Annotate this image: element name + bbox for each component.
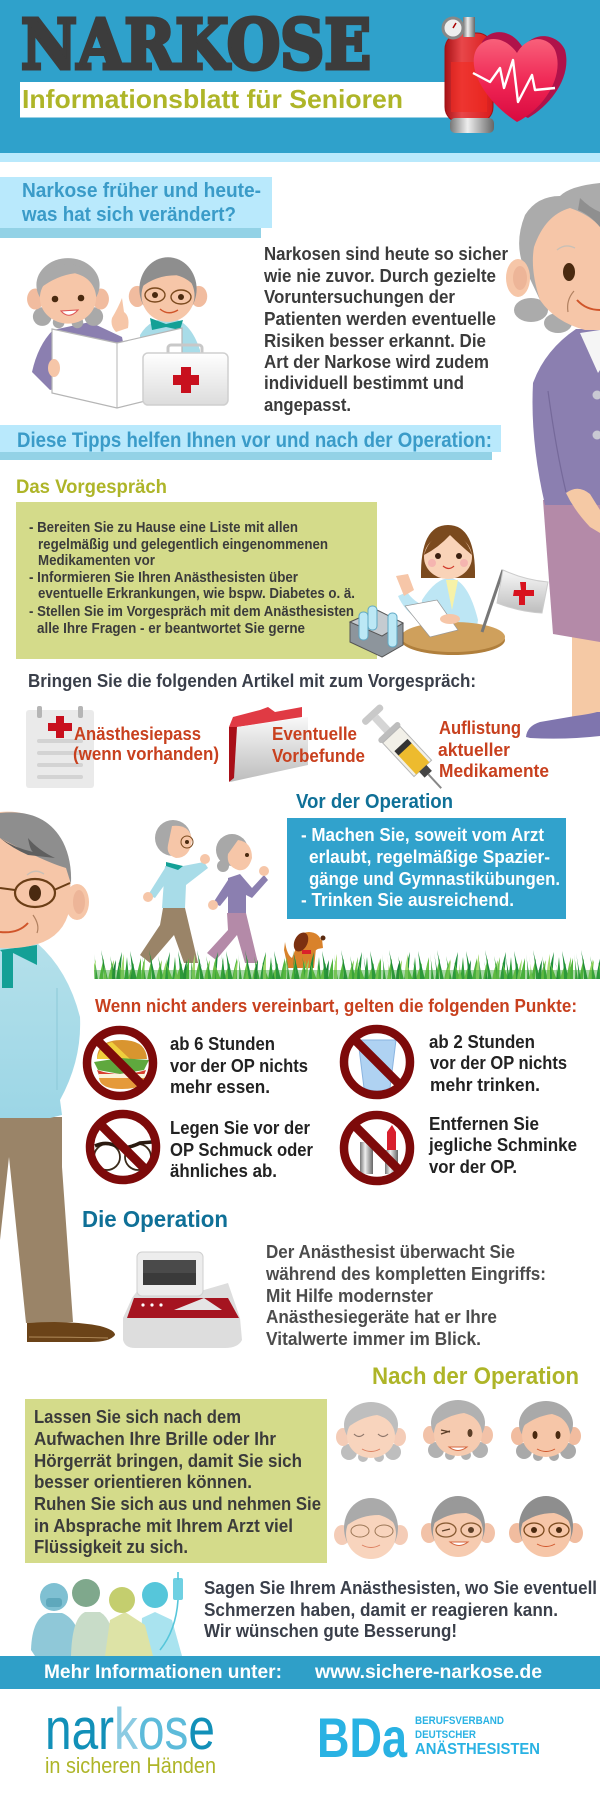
text block: intro paragraph: wie nie zuvor. Durch gezielte [263,266,496,286]
heading band: tips: Diese Tipps helfen Ihnen vor und nach der Operation: [17,429,492,452]
text: no drinks: vor der OP nichts [430,1053,567,1073]
text: no make-up: jegliche Schminke [428,1135,577,1155]
panel: Vorgespräch list: alle Ihre Fragen - er beantwortet Sie gerne [37,621,305,637]
logo: BDA: ANÄSTHESISTEN [415,1741,540,1758]
illustration: large grandpa on left [0,812,115,1342]
panel: before operation tips [287,818,566,919]
text: no make-up: Entfernen Sie [429,1114,539,1134]
icon: first aid kit [143,345,228,405]
icon: no drink [344,1029,410,1095]
text: no drinks: ab 2 Stunden [429,1032,535,1052]
icon: no glasses [90,1114,156,1180]
panel: Vorgespräch list: eventuelle Erkrankungen, wie bspw. Diabetes o. ä. [38,586,355,602]
text: bring items heading: Bringen Sie die folgenden Artikel mit zum Vorgespräch: [28,671,476,691]
illustration: doctor at table [350,525,548,657]
icon: winking man face [421,1496,495,1557]
heading band: tips [0,425,501,460]
text block: intro paragraph: angepasst. [264,395,351,415]
text block: operation: Anästhesiegeräte hat er Ihre [266,1307,497,1327]
icon: anaesthesia machine [123,1252,242,1348]
panel: after operation: Hörgerrät bringen, damit Sie sich [34,1451,302,1471]
panel: before operation tips: - Trinken Sie ausreichend. [301,890,514,910]
panel: after operation: besser orientieren können. [34,1472,252,1492]
label: Anästhesiepass: Anästhesiepass [74,724,201,744]
text: no drinks [429,1032,567,1095]
text block: operation: während des kompletten Eingriffs: [265,1264,546,1284]
text block: operation [265,1242,546,1349]
panel: after operation [25,1399,327,1563]
text: no food: ab 6 Stunden [170,1034,275,1054]
text block: intro paragraph: individuell bestimmt und [264,373,464,393]
panel: before operation tips: erlaubt, regelmäßige Spazier- [309,847,550,867]
text block: intro paragraph: Patienten werden eventuelle [264,309,496,329]
icon: no burger [87,1030,153,1096]
text block: closing note: Wir wünschen gute Besserung! [204,1621,457,1641]
heading: Narkose früher und heute: Narkose früher und heute- [22,180,261,202]
icon: sleeping woman face [336,1402,406,1462]
panel: before operation tips: - Machen Sie, soweit vom Arzt [301,825,544,845]
text block: intro paragraph: Narkosen sind heute so sicher [264,244,508,264]
label: Auflistung aktueller Medikamente: Auflistung [439,718,521,738]
heading: Das Vorgespräch: Das Vorgespräch [16,477,167,498]
heading: conditions: Wenn nicht anders vereinbart, gelten die folgenden Punkte: [95,996,577,1016]
subtitle bar: Informationsblatt für Senioren [22,84,403,114]
text: no food: vor der OP nichts [170,1056,308,1076]
text block: operation: Mit Hilfe modernster [266,1286,433,1306]
text block: intro paragraph [263,244,508,415]
icon: no lipstick [344,1115,410,1181]
panel: Vorgespräch list: Medikamenten vor [38,553,155,569]
text block: operation: Vitalwerte immer im Blick. [266,1329,481,1349]
text: no jewellery: OP Schmuck oder [170,1140,313,1160]
text block: intro paragraph: Voruntersuchungen der [264,287,455,307]
footer band: Mehr Informationen unter: [44,1662,282,1683]
logo: BDA: BERUFSVERBAND [415,1715,504,1727]
logo: narkose in sicheren Händen: narkose [45,1697,215,1762]
text: no jewellery: ähnliches ab. [170,1161,277,1181]
panel: after operation: Ruhen Sie sich aus und nehmen Sie [34,1494,321,1514]
panel: Vorgespräch list: - Informieren Sie Ihren Anästhesisten über [29,570,298,586]
illustration: senior couple reading with first aid kit [27,257,228,408]
panel: Vorgespräch list: - Stellen Sie im Vorgespräch mit dem Anästhesisten [29,604,354,620]
panel: after operation: Flüssigkeit zu sich. [34,1537,188,1557]
heading: Narkose früher und heute [0,177,272,238]
label: Auflistung aktueller Medikamente: Medikamente [439,761,549,781]
logo: BDA: DEUTSCHER [415,1729,476,1741]
text block: intro paragraph: Risiken besser erkannt. Die [264,331,486,351]
heading: Narkose früher und heute: was hat sich verändert? [21,204,236,226]
illustration: walking couple [140,820,326,968]
logo: BDA: BDa [317,1706,408,1769]
illustration: medical team [31,1572,183,1656]
heading: Vor der Operation: Vor der Operation [296,791,453,813]
heading: Nach der Operation: Nach der Operation [372,1363,579,1390]
panel: Vorgespräch list [16,502,377,659]
label: Eventuelle Vorbefunde: Vorbefunde [272,746,365,766]
icon: winking woman face [423,1400,493,1460]
walking man [140,820,210,963]
text block: intro paragraph: Art der Narkose wird zudem [264,352,489,372]
footer band: www.sichere-narkose.de [314,1662,542,1683]
header banner [0,0,600,162]
icon: test tube rack [350,606,403,657]
icon: anaesthesia pass clipboard [26,706,94,788]
label: Eventuelle Vorbefunde: Eventuelle [272,724,357,744]
logo: BDA [317,1706,540,1769]
label: Auflistung aktueller Medikamente [438,718,549,781]
text: no jewellery: Legen Sie vor der [170,1118,310,1138]
text block: closing note: Schmerzen haben, damit er reagieren kann. [204,1600,558,1620]
dog [284,930,326,968]
icon: smiling man face [509,1496,583,1557]
heading: Die Operation: Die Operation [82,1206,228,1232]
text: no jewellery [170,1118,313,1181]
text: no make-up: vor der OP. [429,1157,517,1177]
footer band [0,1656,600,1689]
panel: Vorgespräch list: regelmäßig und gelegentlich eingenommenen [38,537,328,553]
panel: after operation: Lassen Sie sich nach dem [34,1407,241,1427]
walking woman [207,834,269,963]
text: no food: mehr essen. [170,1077,270,1097]
label: Anästhesiepass: (wenn vorhanden) [73,744,219,764]
text: no drinks: mehr trinken. [430,1075,540,1095]
illustration: large grandma on right [506,183,600,739]
text: no make-up [428,1114,577,1177]
panel: before operation tips: gänge und Gymnastikübungen. [309,869,560,889]
icon: smiling woman face [511,1401,581,1461]
icon: anaesthesia gas tank with heart [443,17,566,133]
logo: narkose in sicheren Händen: in sicheren Händen [45,1753,216,1778]
icon: red folder [229,707,308,782]
label: Auflistung aktueller Medikamente: aktueller [438,740,510,760]
text: no food [170,1034,308,1097]
illustration: grass [94,948,600,979]
text block: closing note [204,1578,597,1641]
icon: syringe [360,703,451,798]
label: Eventuelle Vorbefunde [272,724,365,766]
panel: after operation: Aufwachen Ihre Brille oder Ihr [34,1429,276,1449]
icon: sleeping man face [334,1498,408,1559]
panel: Vorgespräch list: - Bereiten Sie zu Hause eine Liste mit allen [29,520,298,536]
title: NARKOSE [21,6,371,86]
text block: operation: Der Anästhesist überwacht Sie [266,1242,515,1262]
label: Anästhesiepass [73,724,219,764]
panel: after operation: in Absprache mit Ihrem Arzt viel [34,1516,293,1536]
